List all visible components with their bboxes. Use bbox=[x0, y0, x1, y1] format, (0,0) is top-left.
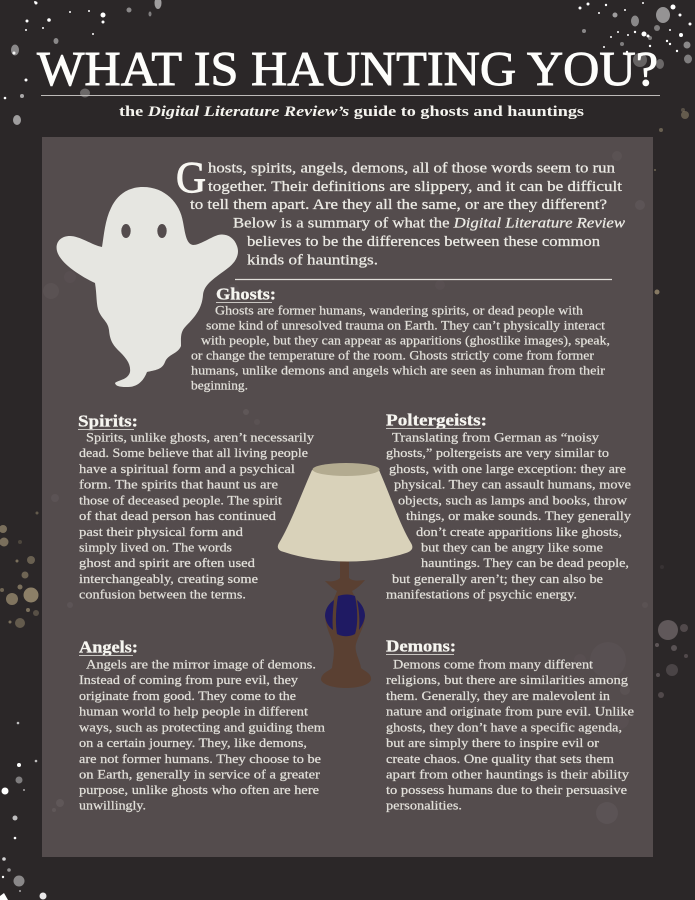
section: ghosts: some kind of unresolved trauma on Earth. They can’t physically interact bbox=[206, 318, 605, 332]
section: ghosts: beginning. bbox=[191, 378, 248, 392]
lamp shade bbox=[278, 470, 412, 562]
section: angels: purpose, unlike ghosts who often are here bbox=[79, 783, 319, 797]
section: angels: Angels are the mirror image of demons. bbox=[86, 658, 316, 672]
section: spirits: interchangeably, creating some bbox=[79, 572, 258, 586]
section: ghosts: Ghosts are former humans, wandering spirits, or dead people with bbox=[215, 304, 584, 318]
panel: main content bbox=[42, 137, 653, 857]
section: poltergeists: hauntings. They can be dead people, bbox=[421, 556, 629, 570]
section: poltergeists: ghosts, with one large exception: they are bbox=[389, 462, 626, 476]
subtitle: the Digital Literature Review’s guide to ghosts and hauntings bbox=[119, 104, 584, 120]
section: angels: on a certain journey. They, like demons, bbox=[79, 736, 307, 750]
intro text with drop cap: believes to be the differences between these common bbox=[247, 234, 601, 250]
paint splatter: grey right bbox=[655, 565, 688, 698]
section: poltergeists bbox=[386, 410, 632, 602]
section: poltergeists: Translating from German as “noisy bbox=[392, 430, 600, 444]
paint splatter: tan left bbox=[0, 108, 689, 628]
icon: ghost bbox=[57, 187, 238, 387]
section: poltergeists: don’t create apparitions like ghosts, bbox=[416, 525, 622, 539]
section: spirits: dead. Some believe that all living people bbox=[79, 446, 308, 460]
section: spirits: past their physical form and bbox=[79, 525, 244, 539]
section: angels bbox=[79, 638, 325, 812]
intro text with drop cap bbox=[176, 153, 625, 268]
intro text with drop cap: together. Their definitions are slippery, and it can be difficult bbox=[208, 179, 622, 195]
section: demons bbox=[386, 636, 634, 812]
section: demons: religions, but there are similarities among bbox=[386, 673, 629, 687]
section: demons: ghosts, they don’t have a specific agenda, bbox=[386, 720, 622, 734]
section: poltergeists: physical. They can assault humans, move bbox=[394, 478, 631, 492]
intro text with drop cap: hosts, spirits, angels, demons, all of those words seem to run bbox=[208, 160, 616, 176]
section: poltergeists: things, or make sounds. They generally bbox=[406, 509, 632, 523]
section: angels: human world to help people in different bbox=[79, 704, 308, 718]
section: ghosts: humans, unlike demons and angels which are seen as inhuman from their bbox=[191, 364, 606, 378]
heading: demons: Demons: bbox=[386, 636, 456, 656]
section: demons: nature and originate from pure evil. Unlike bbox=[386, 704, 634, 718]
section: ghosts: or change the temperature of the room. Ghosts strictly come from former bbox=[191, 348, 595, 362]
paint splatter: top right bbox=[578, 2, 692, 69]
section: angels: ways, such as protecting and guiding them bbox=[79, 720, 325, 734]
section: angels: are not former humans. They choose to be bbox=[79, 752, 321, 766]
section: ghosts bbox=[191, 284, 610, 392]
section: spirits: have a spiritual form and a psychical bbox=[79, 462, 295, 476]
section: poltergeists: but they can be angry like some bbox=[421, 540, 603, 554]
section: angels: Instead of coming from pure evil, they bbox=[79, 673, 299, 687]
heading: angels: Angels: bbox=[79, 638, 138, 656]
title: WHAT IS HAUNTING YOU? bbox=[37, 41, 658, 96]
intro text with drop cap: Below is a summary of what the Digital Literature Review bbox=[233, 216, 625, 232]
section: poltergeists: manifestations of psychic energy. bbox=[386, 588, 577, 602]
section: poltergeists: objects, such as lamps and books, throw bbox=[398, 494, 628, 508]
section: demons: but are simply there to inspire evil or bbox=[386, 736, 600, 750]
section: demons: create chaos. One quality that sets them bbox=[386, 752, 614, 766]
section: demons: personalities. bbox=[386, 798, 462, 812]
section: demons: them. Generally, they are malevolent in bbox=[386, 689, 611, 703]
faint bokeh bbox=[43, 151, 648, 824]
section: poltergeists: ghosts,” poltergeists are very similar to bbox=[386, 446, 609, 460]
section: spirits: confusion between the terms. bbox=[79, 588, 246, 602]
section: angels: originate from good. They come to the bbox=[79, 689, 296, 703]
intro text with drop cap: kinds of hauntings. bbox=[247, 252, 378, 268]
section: demons: apart from other hauntings is their ability bbox=[386, 768, 630, 782]
lamp blue glass bbox=[325, 594, 365, 636]
section: demons: to possess humans due to their persuasive bbox=[386, 783, 627, 797]
section: spirits: form. The spirits that haunt us are bbox=[79, 478, 278, 492]
section: spirits bbox=[78, 412, 315, 602]
section: angels: on Earth, generally in service of a greater bbox=[79, 768, 321, 782]
section: angels: unwillingly. bbox=[79, 798, 146, 812]
heading: spirits: Spirits: bbox=[78, 412, 138, 430]
paint splatter: bottom left bbox=[0, 722, 46, 900]
icon: lamp bbox=[278, 463, 412, 688]
section: ghosts: with people, but they can appear as apparitions (ghostlike images), speak, bbox=[201, 334, 610, 348]
drop cap: G bbox=[176, 153, 206, 202]
intro text with drop cap: to tell them apart. Are they all the same, or are they different? bbox=[190, 197, 607, 213]
section: spirits: those of deceased people. The spirit bbox=[79, 494, 282, 508]
heading: ghosts: Ghosts: bbox=[216, 284, 276, 304]
section: spirits: Spirits, unlike ghosts, aren’t necessarily bbox=[86, 430, 315, 444]
section: spirits: ghost and spirit are often used bbox=[79, 556, 256, 570]
section: spirits: of that dead person has continued bbox=[79, 509, 277, 523]
section: poltergeists: but generally aren’t; they can also be bbox=[392, 572, 603, 586]
heading: poltergeists: Poltergeists: bbox=[386, 410, 487, 430]
section: demons: Demons come from many different bbox=[393, 658, 593, 672]
section: spirits: simply lived on. The words bbox=[79, 540, 232, 554]
paint splatter: top left bbox=[4, 0, 162, 125]
lamp neck and body bbox=[321, 560, 371, 688]
